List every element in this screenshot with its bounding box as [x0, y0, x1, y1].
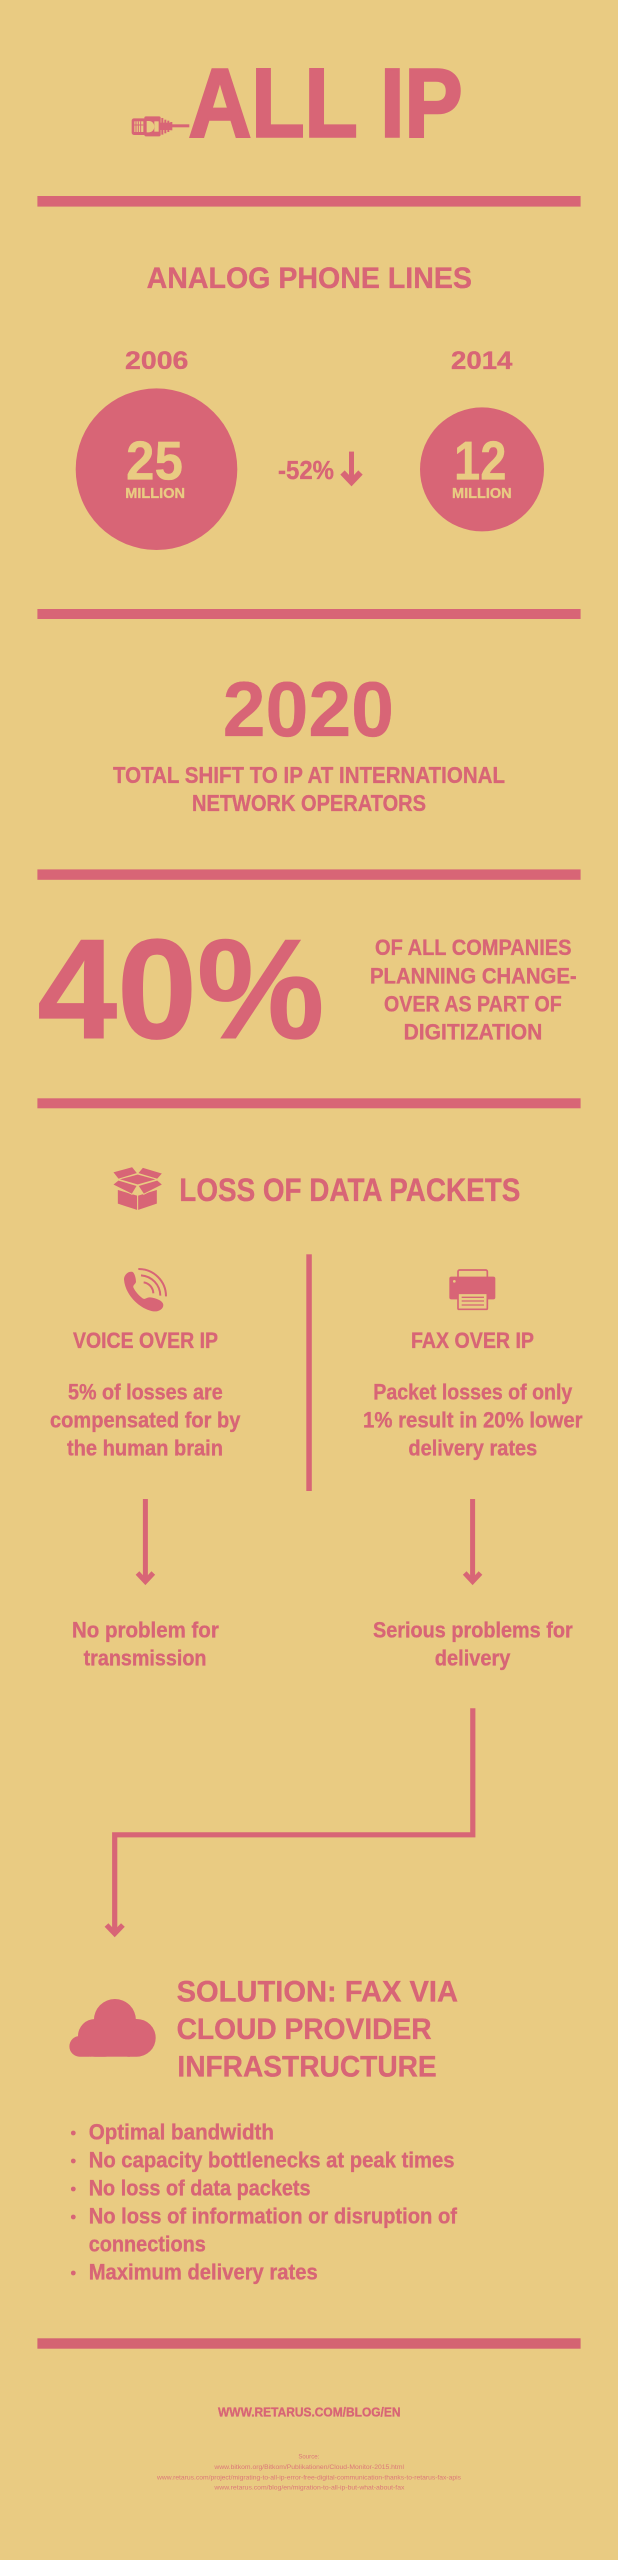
sources: www.retarus.com/project/migrating-to-all-ip-error-free-digital-communication-thanks-to-retarus-fax-apis	[156, 2474, 462, 2482]
heading: solution: INFRASTRUCTURE	[177, 2050, 437, 2083]
bullet list: Maximum delivery rates	[89, 2259, 318, 2284]
divider bar 1	[37, 196, 581, 207]
heading: solution: CLOUD PROVIDER	[177, 2013, 432, 2046]
heading: fax over IP: FAX OVER IP	[411, 1328, 534, 1353]
divider bar 2	[37, 609, 581, 619]
description	[113, 762, 505, 816]
circle: 25 million	[76, 388, 237, 550]
description: NETWORK OPERATORS	[192, 790, 426, 816]
heading: solution	[177, 1976, 458, 2083]
circle: 12 million: MILLION	[452, 486, 512, 502]
bullet list: connections	[89, 2231, 206, 2256]
panel: 2020	[113, 665, 505, 816]
heading: loss of data packets: LOSS OF DATA PACKETS	[179, 1172, 520, 1208]
divider bar 5	[37, 2338, 581, 2349]
sources: www.retarus.com/blog/en/migration-to-all-ip-but-what-about-fax	[213, 2485, 405, 2492]
icon: network plug	[132, 116, 189, 136]
sources: www.bitkom.org/Bitkom/Publikationen/Cloud-Monitor-2015.html	[213, 2464, 404, 2471]
description: delivery rates	[408, 1435, 537, 1460]
bullet list: Optimal bandwidth	[89, 2119, 274, 2144]
description: compensated for by	[50, 1407, 241, 1432]
result text: No problem for	[72, 1617, 219, 1642]
title: ALL IP with network plug	[132, 48, 463, 158]
title text: ALL IP	[188, 48, 462, 158]
arrow down	[138, 1499, 153, 1582]
circle: 12 million	[420, 407, 544, 531]
description	[370, 935, 577, 1044]
big number 40%: 40%	[37, 910, 324, 1069]
description: TOTAL SHIFT TO IP AT INTERNATIONAL	[113, 762, 505, 788]
panel: analog phone lines	[76, 262, 544, 550]
icon: open box	[113, 1167, 163, 1211]
change label: -52% with arrow: -52%	[278, 455, 334, 485]
bullet list: No loss of information or disruption of	[89, 2203, 458, 2228]
column divider	[306, 1254, 312, 1491]
description: 1% result in 20% lower	[363, 1407, 583, 1432]
column: voice over IP	[50, 1269, 241, 1670]
panel: solution	[69, 1976, 458, 2284]
icon: printer	[449, 1270, 495, 1309]
bullet list	[71, 2119, 458, 2284]
description: Packet losses of only	[373, 1379, 573, 1404]
result text	[373, 1617, 573, 1670]
icon: phone	[124, 1269, 166, 1311]
year 2006: 2006	[125, 347, 188, 375]
divider bar 4	[37, 1098, 581, 1108]
description: PLANNING CHANGE-	[370, 964, 577, 988]
heading: voice over IP: VOICE OVER IP	[73, 1328, 218, 1353]
result text: transmission	[84, 1645, 206, 1670]
description	[363, 1379, 583, 1460]
heading: solution: SOLUTION: FAX VIA	[177, 1976, 458, 2009]
divider bar 3	[37, 869, 581, 880]
result text: Serious problems for	[373, 1617, 573, 1642]
circle: 25 million: MILLION	[125, 486, 185, 502]
result text: delivery	[435, 1645, 511, 1670]
panel: loss of data packets	[50, 1167, 583, 1670]
connector arrow to solution	[106, 1708, 473, 1934]
sources	[156, 2454, 462, 2492]
description	[50, 1379, 241, 1460]
result text	[72, 1617, 219, 1670]
big year 2020: 2020	[223, 665, 394, 753]
circle: 12 million: 12	[454, 430, 506, 492]
description: OVER AS PART OF	[384, 991, 562, 1016]
description: the human brain	[67, 1435, 223, 1460]
sources: Source:	[298, 2454, 319, 2460]
heading: analog phone lines: ANALOG PHONE LINES	[147, 262, 472, 295]
arrow down	[465, 1499, 480, 1582]
bullet list: No capacity bottlenecks at peak times	[89, 2147, 454, 2172]
change label: -52% with arrow	[278, 452, 360, 485]
footer url: WWW.RETARUS.COM/BLOG/EN	[218, 2405, 400, 2420]
year 2014: 2014	[451, 347, 512, 375]
icon: cloud	[69, 1999, 156, 2057]
bullet list: No loss of data packets	[89, 2175, 311, 2200]
panel: 40 percent	[37, 910, 577, 1069]
description: DIGITIZATION	[404, 1019, 542, 1044]
circle: 25 million: 25	[126, 430, 183, 492]
description: OF ALL COMPANIES	[375, 935, 572, 960]
description: 5% of losses are	[68, 1379, 223, 1404]
column: fax over IP	[363, 1270, 583, 1670]
